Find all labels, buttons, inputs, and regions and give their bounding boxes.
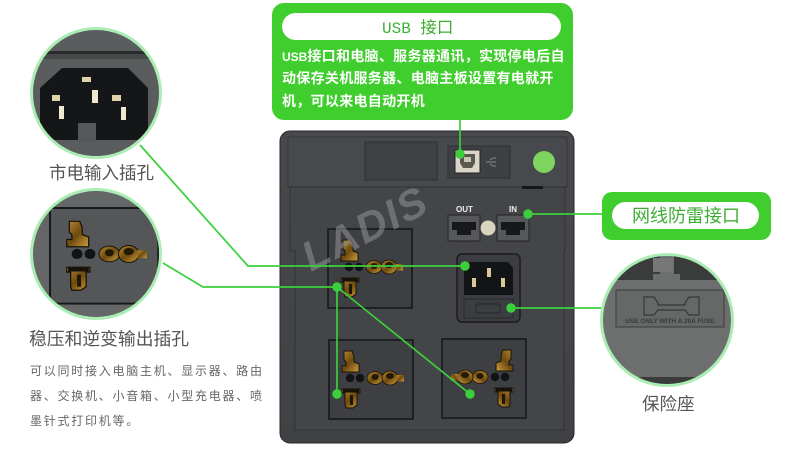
callout title: USB 接口 <box>382 18 453 38</box>
callout text <box>282 48 565 109</box>
description text: 可以同时接入电脑主机、显示器、路由 <box>30 363 264 378</box>
callout text: USB接口和电脑、服务器通讯，实现停电后自 <box>282 48 565 64</box>
label: OUT: OUT <box>456 205 473 214</box>
callout: USB port <box>272 3 573 120</box>
callout: network surge port: 网线防雷接口 <box>632 206 740 226</box>
label: IN: IN <box>509 205 517 214</box>
network port IN <box>497 215 529 241</box>
outlet lower left <box>329 340 413 419</box>
zoom circle: fuse holder <box>600 253 734 387</box>
watermark: LADIS <box>294 176 436 280</box>
zoom circle: outlet <box>30 188 162 320</box>
outlet lower right <box>442 339 526 418</box>
power inlet and fuse module <box>457 254 520 322</box>
connector lines <box>140 120 603 394</box>
UPS rear panel <box>280 131 574 443</box>
callout text: 动保存关机服务器、电脑主板设置有电就开 <box>282 70 554 86</box>
icon: green sticker <box>533 151 555 173</box>
icon: USB port <box>455 150 480 173</box>
description text <box>30 363 264 428</box>
outlet upper left <box>328 229 412 308</box>
icon: USB symbol <box>486 158 496 166</box>
label: mains input: 市电输入插孔 <box>49 163 154 183</box>
description text: 墨针式打印机等。 <box>30 413 140 428</box>
network port OUT <box>448 215 480 241</box>
label: regulated and inverter output: 稳压和逆变输出插孔 <box>29 329 189 349</box>
zoom circle: fuse holder: USE ONLY WITH A 20A FUSE <box>625 318 715 325</box>
label: fuse holder: 保险座 <box>642 394 694 414</box>
zoom circle: power inlet <box>30 27 162 162</box>
connector dots <box>332 149 533 399</box>
callout: network surge port <box>602 192 771 240</box>
callout text: 机，可以来电自动开机 <box>282 93 425 109</box>
description text: 器、交换机、小音箱、小型充电器、喷 <box>30 388 264 403</box>
